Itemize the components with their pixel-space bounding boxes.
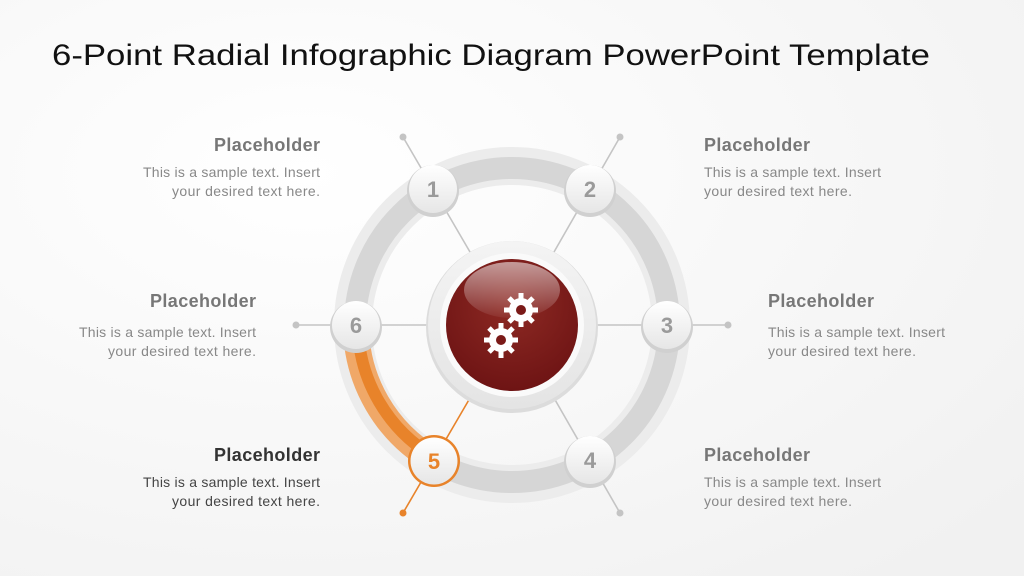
text 4: your desired text here. bbox=[704, 493, 852, 509]
spokes bbox=[296, 137, 728, 513]
text 6 bbox=[79, 291, 256, 359]
text 1 bbox=[143, 135, 320, 199]
node 3 bbox=[641, 301, 693, 353]
text 2: Placeholder bbox=[704, 135, 810, 155]
node 1: 1 bbox=[427, 177, 439, 202]
orange arc bbox=[356, 325, 434, 460]
grey band bbox=[355, 168, 669, 482]
text 1: Placeholder bbox=[214, 135, 320, 155]
text 5 bbox=[143, 445, 320, 509]
node 2: 2 bbox=[584, 177, 596, 202]
node 3: 3 bbox=[661, 313, 673, 338]
icon: gears bbox=[484, 293, 538, 358]
text 2 bbox=[704, 135, 881, 199]
node 4 bbox=[564, 436, 616, 488]
node 5: 5 bbox=[428, 449, 440, 474]
text 5: Placeholder bbox=[214, 445, 320, 465]
node 2 bbox=[564, 165, 616, 217]
text 3: This is a sample text. Insert bbox=[768, 324, 945, 340]
node 4: 4 bbox=[584, 448, 597, 473]
center disc bbox=[426, 241, 598, 413]
text 4: This is a sample text. Insert bbox=[704, 474, 881, 490]
radial diagram bbox=[292, 134, 732, 516]
text 3: your desired text here. bbox=[768, 343, 916, 359]
node 6: 6 bbox=[350, 313, 362, 338]
text 1: your desired text here. bbox=[172, 183, 320, 199]
nodes bbox=[330, 165, 693, 488]
node 6 bbox=[330, 301, 382, 353]
text 3: Placeholder bbox=[768, 291, 874, 311]
text 5: This is a sample text. Insert bbox=[143, 474, 320, 490]
title: 6-Point Radial Infographic Diagram PowerPoint Template bbox=[52, 39, 930, 72]
text 6: Placeholder bbox=[150, 291, 256, 311]
text 4: Placeholder bbox=[704, 445, 810, 465]
text blocks bbox=[79, 135, 945, 509]
text 5: your desired text here. bbox=[172, 493, 320, 509]
text 3 bbox=[768, 291, 945, 359]
node 5 bbox=[408, 435, 460, 487]
text 4 bbox=[704, 445, 881, 509]
text 1: This is a sample text. Insert bbox=[143, 164, 320, 180]
outer light ring bbox=[353, 166, 671, 484]
text 6: your desired text here. bbox=[108, 343, 256, 359]
text 6: This is a sample text. Insert bbox=[79, 324, 256, 340]
text 2: This is a sample text. Insert bbox=[704, 164, 881, 180]
node 1 bbox=[407, 165, 459, 217]
text 2: your desired text here. bbox=[704, 183, 852, 199]
